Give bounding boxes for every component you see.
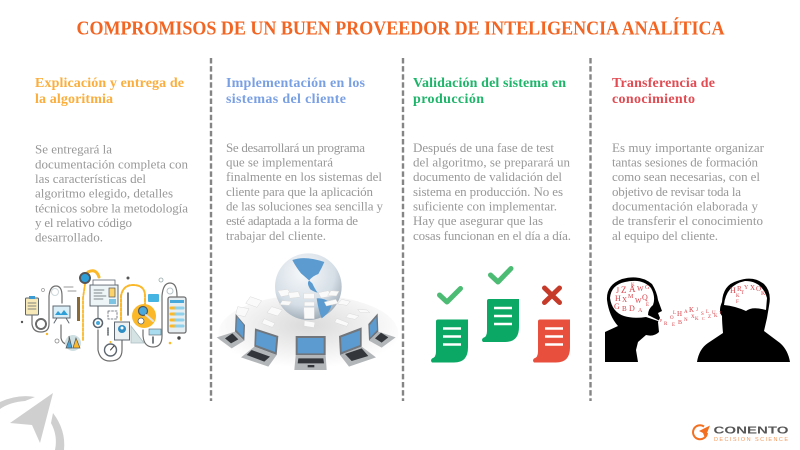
panel: transferencia (605, 76, 790, 362)
icon: two heads exchanging letters: J (696, 308, 698, 313)
heading: explicación (35, 76, 184, 107)
heading: implementación (226, 76, 366, 107)
heading: implementación: sistemas del cliente (226, 92, 346, 107)
icon: two heads exchanging letters: L (673, 311, 676, 316)
icon: two heads exchanging letters: K (761, 291, 766, 297)
icon: two heads exchanging letters: W (635, 297, 642, 305)
text block: explicación: documentación completa con (35, 156, 188, 171)
text block: explicación: técnicos sobre la metodología (35, 200, 188, 215)
clipboard (26, 298, 38, 315)
icon: two heads exchanging letters: K (631, 283, 635, 288)
icon: two heads exchanging letters (605, 277, 790, 362)
heading: transferencia: conocimiento (612, 92, 695, 107)
text block: explicación: Se entregará la (35, 142, 112, 156)
heading: transferencia: Transferencia de (612, 76, 715, 91)
text block: transferencia (612, 140, 765, 243)
laptop left (241, 328, 278, 367)
icon: two heads exchanging letters: C (702, 316, 705, 321)
text block: implementación: trabajar del cliente. (226, 228, 326, 243)
icon: two heads exchanging letters: O (670, 316, 674, 321)
icon: two heads exchanging letters: A (629, 284, 636, 294)
text block: transferencia: como sean necesarias, con el (612, 169, 760, 184)
column dividers (211, 58, 590, 401)
text block: validación: suficiente con implementar. (413, 199, 557, 214)
icon: two heads exchanging letters: Z (708, 315, 711, 320)
icon: two heads exchanging letters: T (741, 291, 744, 296)
icon: two heads exchanging letters: P (660, 318, 663, 323)
icon: approved document (482, 268, 519, 342)
text block: explicación: algoritmo elegido, detalles (35, 186, 173, 200)
text block: explicación: las características del (35, 171, 146, 186)
icon: two heads exchanging letters: E (672, 323, 675, 328)
icon: two heads exchanging letters: W (637, 285, 644, 293)
icon: two heads exchanging letters: D (629, 304, 635, 313)
icon: two heads exchanging letters: M (628, 294, 634, 300)
logo: Conento: CONENTO (714, 426, 789, 436)
title: COMPROMISOS DE UN BUEN PROVEEDOR DE INTELIGENCIA ANALÍTICA (76, 16, 725, 40)
heading: validación: producción (413, 92, 484, 107)
icon: two heads exchanging letters: E (646, 303, 649, 308)
text block: validación: Hay que asegurar que las (413, 213, 543, 228)
icon: two heads exchanging letters: K (736, 294, 740, 299)
heading: explicación: Explicación y entrega de (35, 76, 184, 91)
heading: explicación: la algoritmia (35, 92, 113, 107)
text block: implementación: Se desarrollará un programa (226, 140, 365, 155)
icon: two heads exchanging letters: U (712, 311, 716, 316)
icon: two heads exchanging letters: G (645, 285, 650, 291)
gear (80, 273, 90, 283)
icon: rejected document (533, 288, 570, 362)
icon: two heads exchanging letters: H (677, 310, 682, 318)
heading: implementación: Implementación en los (226, 76, 366, 91)
text block: validación: sistema en producción. No es (413, 184, 563, 199)
panel: validación (413, 76, 571, 362)
text block: validación: documento de validación del (413, 169, 562, 184)
icon: globe with laptops (214, 253, 398, 372)
flying documents (236, 289, 370, 328)
icon: two heads exchanging letters: S (701, 312, 704, 317)
text block: transferencia: de transferir el conocimiento (612, 213, 763, 228)
text block: implementación: cliente para que la aplicación (226, 184, 374, 199)
icon: two heads exchanging letters: R (737, 285, 742, 293)
icon: two heads exchanging letters: J (616, 286, 619, 295)
icon: two heads exchanging letters: K (695, 317, 699, 322)
icon: two heads exchanging letters: O (756, 285, 761, 293)
text block: transferencia: Es muy importante organizar (612, 140, 765, 155)
panel: implementación (214, 76, 398, 372)
icon: two heads exchanging letters: R (664, 322, 668, 327)
icon: approved document (431, 288, 468, 362)
laptop center (294, 336, 327, 370)
icon: two heads exchanging letters: K (689, 306, 694, 314)
icon: two heads exchanging letters: X (750, 284, 755, 292)
text block: implementación: esté adaptada a la forma de (226, 213, 358, 228)
icon: two heads exchanging letters: H (730, 286, 736, 295)
icon: two heads exchanging letters: A (684, 310, 688, 315)
text block: explicación: desarrollado. (35, 229, 103, 244)
heading: transferencia (612, 76, 715, 107)
text block: validación: cosas funcionan en el día a día. (413, 228, 571, 243)
laptop far right (368, 313, 396, 348)
heading: validación: Validación del sistema en (413, 76, 566, 91)
icon: analytics process illustration (21, 271, 186, 361)
icon: two heads exchanging letters: F (736, 300, 739, 305)
laptop right (339, 327, 376, 367)
icon: two heads exchanging letters: K (714, 314, 718, 319)
panel: explicación (21, 76, 188, 361)
text block: transferencia: objetivo de revisar toda la (612, 184, 741, 199)
text block: transferencia: documentación elaborada y (612, 199, 758, 214)
icon: two heads exchanging letters: B (622, 305, 627, 313)
laptop far left (217, 314, 245, 348)
heading: validación (413, 76, 566, 107)
portrait card (114, 322, 130, 340)
icon: two heads exchanging letters: T (719, 310, 722, 315)
icon: two heads exchanging letters: A (638, 308, 643, 314)
text block: implementación (226, 140, 384, 243)
icon: two heads exchanging letters: H (615, 294, 621, 303)
text block: explicación: y el relativo código (35, 215, 132, 230)
text block: implementación: finalmente en los sistemas del (226, 169, 382, 184)
easel (53, 306, 70, 318)
phone (168, 297, 186, 333)
text block: transferencia: al equipo del cliente. (612, 228, 718, 243)
text block: validación (413, 140, 571, 243)
text block: validación: del algoritmo, se preparará un (413, 155, 570, 170)
icon: two heads exchanging letters: Z (621, 285, 626, 295)
icon: watermark arrow (0, 393, 64, 450)
text block: validación: Después de una fase de test (413, 140, 554, 155)
browser window (90, 285, 118, 306)
icon: two heads exchanging letters: B (678, 320, 682, 326)
icon: two heads exchanging letters: Y (744, 285, 749, 291)
icon: two heads exchanging letters: X (691, 315, 695, 320)
icon: two heads exchanging letters: Q (642, 293, 648, 302)
text block: implementación: de las soluciones sea sencilla y (226, 199, 384, 214)
icon: two heads exchanging letters: N (684, 318, 688, 323)
icon: two heads exchanging letters: G (614, 302, 620, 311)
magnifier circle (132, 304, 156, 328)
logo: Conento (693, 425, 789, 443)
text block: implementación: que se implementará (226, 155, 333, 170)
icon: two heads exchanging letters: L (706, 310, 709, 315)
text block: transferencia: tantas sesiones de formación (612, 155, 758, 170)
logo: Conento: DECISION SCIENCE (714, 437, 788, 443)
text block: explicación (35, 142, 188, 244)
icon: two heads exchanging letters: X (622, 296, 627, 304)
